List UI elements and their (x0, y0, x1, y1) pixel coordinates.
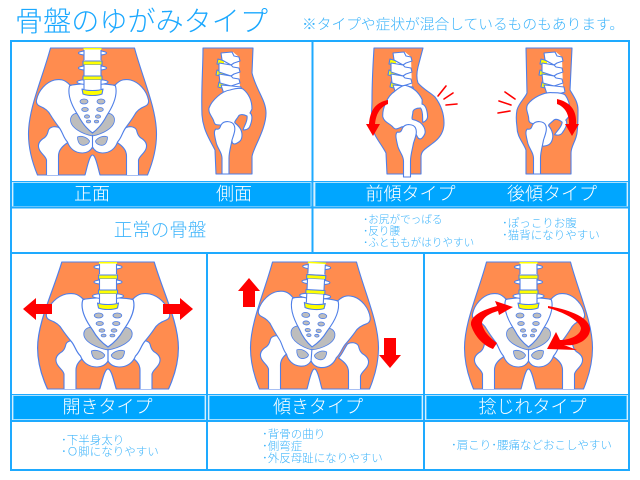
arrow: right (163, 298, 193, 320)
arrow: up (238, 278, 260, 307)
text: tilted type symptoms (262, 428, 383, 465)
arrow: twist left (471, 301, 513, 349)
illustration: open pelvis (38, 262, 178, 397)
illustration: side view (202, 48, 266, 174)
arrow: twist right (547, 306, 590, 350)
panel: open type (13, 262, 205, 458)
text: forward tilt symptoms: ･反り腰 (363, 226, 400, 238)
note: ※タイプや症状が混合しているものもあります。 (302, 16, 624, 34)
illustration: twisted pelvis (464, 262, 592, 397)
title: 骨盤のゆがみタイプ (15, 6, 268, 37)
illustration: tilted pelvis (250, 261, 378, 399)
text: forward tilt symptoms: ･ふとももがはりやすい (363, 237, 474, 249)
text: backward tilt symptoms: ･ぽっこりお腹 (502, 217, 577, 230)
text: forward tilt symptoms: ･お尻がでっぱる (363, 214, 442, 226)
header bar: twisted type (426, 396, 627, 420)
header bar: tilt types: 後傾タイプ (507, 184, 597, 204)
arrow: backward rotation (557, 99, 579, 136)
header bar: tilted type: 傾きタイプ (273, 397, 363, 417)
caption: normal pelvis: 正常の骨盤 (114, 220, 206, 240)
illustration: front view (28, 48, 156, 183)
text: forward tilt symptoms (363, 214, 474, 249)
header bar: tilt types: 前傾タイプ (366, 184, 456, 204)
header bar: front and side: 正面 (74, 184, 110, 204)
text: backward tilt symptoms: ･猫背になりやすい (502, 229, 600, 242)
header bar: open type (13, 396, 205, 420)
panel: normal pelvis (13, 48, 311, 240)
arrow: forward rotation (366, 100, 388, 136)
panel: twisted type (426, 262, 627, 452)
text: open type symptoms: ･下半身太り (61, 434, 124, 447)
illustration: forward tilt (366, 48, 457, 177)
ticks (498, 92, 515, 113)
arrow: left (23, 298, 52, 320)
header bar: open type: 開きタイプ (62, 397, 152, 417)
text: tilted type symptoms: ･背骨の曲り (262, 428, 325, 441)
text: open type symptoms: ･Ｏ脚になりやすい (61, 446, 159, 458)
arrow: down (379, 338, 401, 368)
header bar: tilted type (209, 396, 422, 420)
header bar: front and side: 側面 (216, 184, 252, 204)
text: tilted type symptoms: ･外反母趾になりやすい (262, 452, 383, 465)
text: backward tilt symptoms (502, 217, 600, 242)
header bar: front and side (13, 182, 311, 206)
panel: tilted type (209, 261, 422, 465)
header bar: twisted type: 捻じれタイプ (478, 397, 586, 417)
text: tilted type symptoms: ･側弯症 (262, 440, 302, 453)
text: open type symptoms (61, 434, 159, 458)
header bar: tilt types (315, 182, 627, 206)
illustration: backward tilt (498, 48, 579, 174)
ticks (438, 86, 457, 105)
text: twisted type symptoms: ･肩こり･腰痛などおこしやすい (451, 439, 612, 452)
panel: forward and backward tilt (315, 48, 627, 249)
